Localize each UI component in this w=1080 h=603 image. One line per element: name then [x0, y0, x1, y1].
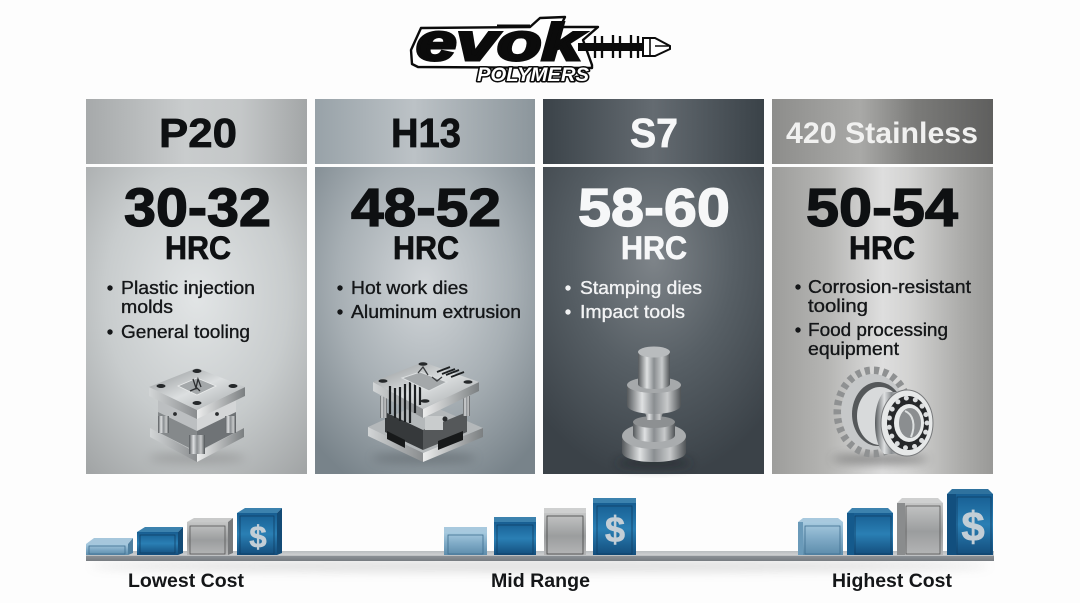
uses list: Stamping dies [580, 278, 702, 298]
bar with dollar sign: $ [605, 509, 625, 550]
bar with dollar sign: $ [249, 519, 267, 554]
panel: S7 [543, 99, 764, 474]
hardness value: 58-60 [578, 178, 730, 238]
body panel background [543, 167, 764, 474]
bar [187, 518, 233, 555]
hardness value: 48-52 [351, 178, 501, 238]
HRC label: HRC [393, 230, 459, 266]
bar [897, 498, 943, 555]
bar with dollar sign [593, 498, 636, 555]
body panel background [772, 167, 993, 474]
uses list: Corrosion-resistant [808, 277, 971, 297]
body panel background [86, 167, 307, 474]
bar with dollar sign: $ [961, 503, 985, 550]
logo macron accent [497, 24, 530, 28]
shelf shadow [90, 560, 990, 572]
logo: Evok Polymers [411, 14, 670, 86]
header: P20 [86, 99, 307, 164]
icon: hot work die [368, 362, 483, 464]
uses list: Food processing [808, 320, 948, 340]
panel: P20 [86, 99, 307, 474]
uses list [337, 278, 521, 322]
hardness value: 30-32 [124, 178, 271, 238]
logo outline [411, 17, 598, 68]
cost group: lowest [86, 508, 282, 592]
header: 420 Stainless [772, 99, 993, 164]
panel: 420 Stainless [772, 99, 993, 474]
uses list [795, 277, 971, 359]
body panel background [315, 167, 535, 474]
HRC label: HRC [165, 230, 231, 266]
HRC label: HRC [621, 230, 687, 266]
uses list [565, 278, 702, 322]
logo subtitle: POLYMERS [477, 65, 589, 86]
header: H13: H13 [391, 110, 461, 156]
panel: H13 [315, 99, 535, 474]
bar [494, 517, 536, 555]
bar [798, 518, 843, 555]
uses list: Impact tools [580, 302, 685, 322]
uses list: Hot work dies [351, 278, 468, 298]
uses list [107, 278, 255, 342]
cost shelf [86, 551, 994, 561]
bar [137, 527, 183, 555]
hardness value: 50-54 [806, 178, 958, 238]
HRC label: HRC [849, 230, 915, 266]
logo: screw [578, 35, 670, 58]
header: 420 Stainless: 420 Stainless [786, 117, 978, 150]
bar with dollar sign [947, 489, 993, 555]
cost group: mid range [444, 498, 636, 592]
bar [544, 508, 586, 555]
bar [444, 527, 487, 555]
label: Highest Cost [832, 571, 953, 592]
header: H13 [315, 99, 535, 164]
label: Mid Range [491, 571, 590, 592]
label: Lowest Cost [128, 571, 245, 592]
icon: gear and bearing [832, 371, 933, 464]
header: S7 [543, 99, 764, 164]
header: S7: S7 [630, 110, 678, 156]
header: P20: P20 [159, 110, 237, 156]
bar [86, 538, 133, 555]
uses list: molds [121, 297, 173, 317]
icon: punch tool [616, 346, 692, 468]
uses list: tooling [808, 296, 868, 316]
bar [847, 508, 893, 555]
bar with dollar sign [237, 508, 282, 555]
uses list: equipment [808, 339, 899, 359]
cost group: highest [798, 489, 993, 592]
uses list: Aluminum extrusion [351, 302, 521, 322]
icon: plastic injection mold [149, 368, 245, 464]
uses list: Plastic injection [121, 278, 255, 298]
uses list: General tooling [121, 322, 250, 342]
logo wordmark: evok [416, 14, 586, 72]
